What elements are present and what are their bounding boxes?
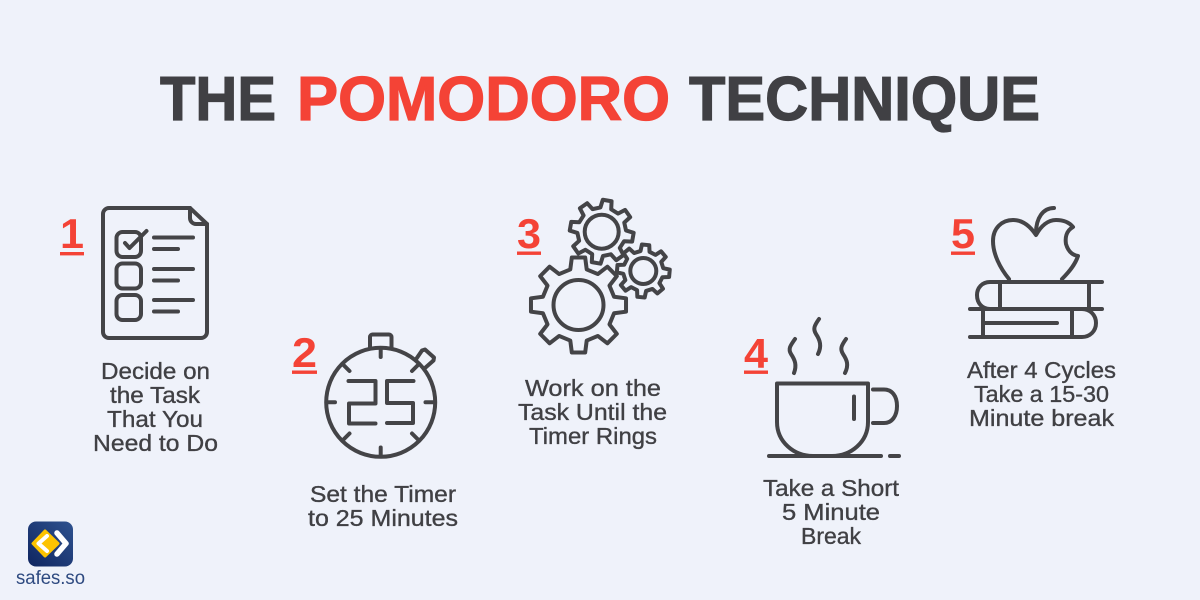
title <box>160 65 1040 134</box>
step 5 text: After 4 Cycles <box>967 357 1116 383</box>
step 2 text: Set the Timer <box>310 481 456 507</box>
panel: step 5 <box>951 208 1116 431</box>
title: POMODORO <box>297 65 670 134</box>
title: TECHNIQUE <box>689 65 1040 134</box>
logo: safes.so <box>16 522 85 589</box>
panel: step 3 <box>517 195 672 449</box>
step 3 text: Task Until the <box>518 399 667 425</box>
step 5 text: Take a 15-30 <box>974 381 1109 407</box>
icon: checklist document <box>103 208 207 338</box>
icon: coffee cup <box>769 319 899 456</box>
step 2 text: to 25 Minutes <box>308 505 458 531</box>
icon: gears <box>531 195 672 353</box>
step 1 text: That You <box>107 406 203 432</box>
step 3 text <box>518 375 667 449</box>
step 2 text <box>308 481 458 531</box>
step number 3: 3 <box>517 210 541 257</box>
step 1 text: Decide on <box>101 358 210 384</box>
step 1 text <box>93 358 218 456</box>
title: THE <box>160 65 276 134</box>
step 4 text <box>763 475 900 549</box>
step 5 text <box>967 357 1116 431</box>
icon: stopwatch showing 25 <box>326 334 435 457</box>
step 3 text: Timer Rings <box>529 423 657 449</box>
panel: step 2 <box>292 329 458 531</box>
panel: step 1 <box>60 208 218 456</box>
logo: safes.so: safes.so <box>16 568 85 589</box>
icon: apple on books <box>970 208 1102 337</box>
step 1 text: the Task <box>110 382 201 408</box>
panel: step 4 <box>744 319 900 549</box>
step 5 text: Minute break <box>969 405 1115 431</box>
step number 2: 2 <box>292 329 317 376</box>
step number 4: 4 <box>744 330 769 377</box>
step 4 text: Take a Short <box>763 475 900 501</box>
step 1 text: Need to Do <box>93 430 218 456</box>
step 3 text: Work on the <box>525 375 661 401</box>
step number 1: 1 <box>60 210 84 257</box>
step 4 text: 5 Minute <box>782 499 880 525</box>
step 4 text: Break <box>801 523 861 549</box>
step number 5: 5 <box>951 210 975 257</box>
